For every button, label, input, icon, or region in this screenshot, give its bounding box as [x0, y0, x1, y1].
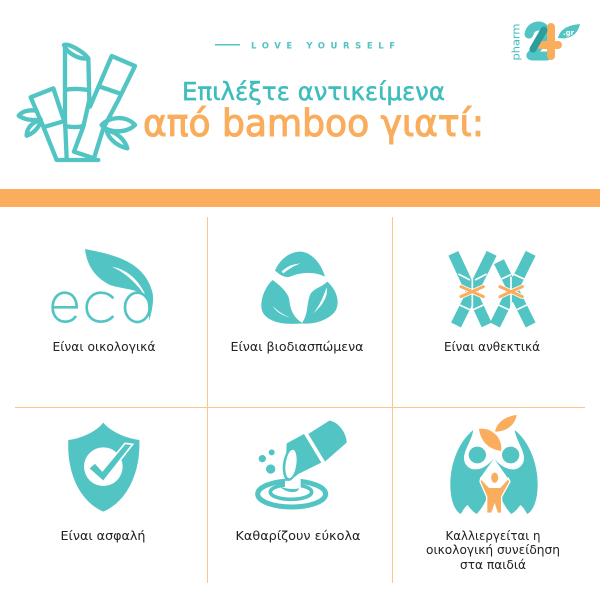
logo: pharm24.gr: pharm	[510, 24, 522, 60]
label: στα παιδιά	[460, 557, 526, 572]
icon: eco leaf	[53, 249, 153, 322]
panel: durable	[444, 253, 540, 354]
panel: eco	[52, 249, 156, 354]
title line 1: Επιλέξτε αντικείμενα	[182, 77, 445, 106]
panel: safe	[60, 422, 146, 543]
panel: easy clean	[236, 421, 360, 543]
orange band	[0, 189, 600, 207]
label	[426, 528, 560, 572]
icon: family with leaves	[450, 415, 538, 514]
icon: shield	[68, 422, 139, 512]
icon: pouring bamboo	[258, 421, 347, 507]
label: Καλλιεργείται η	[446, 528, 540, 543]
icon: crossed bamboo	[453, 253, 531, 325]
tagline: LOVE YOURSELF	[251, 42, 395, 52]
logo: pharm24.gr	[510, 24, 580, 60]
label: Είναι οικολογικά	[52, 339, 156, 354]
panel: children awareness	[426, 415, 560, 572]
icon: recycling leaves	[261, 252, 338, 324]
label: Είναι βιοδιασπώμενα	[230, 339, 364, 354]
label: Είναι ασφαλή	[60, 528, 146, 543]
title line 2: από bamboo γιατί:	[143, 102, 484, 145]
label: οικολογική συνείδηση	[426, 542, 560, 557]
icon: bamboo stalks	[19, 45, 135, 160]
label: Καθαρίζουν εύκολα	[236, 528, 360, 543]
logo: pharm24.gr: .gr	[563, 29, 575, 37]
panel: biodegradable	[230, 252, 364, 354]
label: Είναι ανθεκτικά	[444, 339, 540, 354]
